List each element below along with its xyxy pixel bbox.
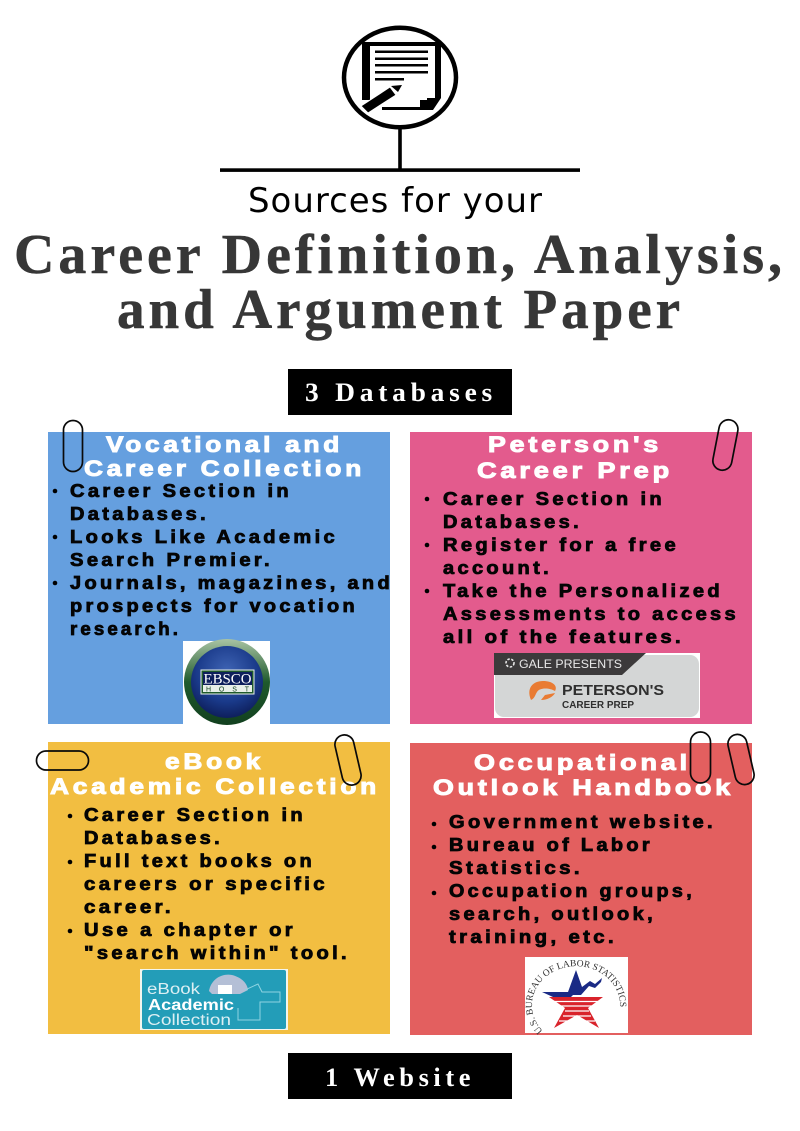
bullet list: Databases. xyxy=(84,828,223,848)
panel heading: Outlook Handbook xyxy=(433,775,734,800)
bullet list: search, outlook, xyxy=(449,904,656,924)
panel heading xyxy=(84,432,365,481)
bullet list: "search within" tool. xyxy=(84,943,350,963)
bullet list: account. xyxy=(443,558,552,578)
logo: eBook Academic Collection xyxy=(140,969,288,1030)
logo: EBSCO host: HOST xyxy=(206,686,250,693)
bullet list: Register for a free xyxy=(443,535,679,555)
logo: U.S. Bureau of Labor Statistics: U.S. BUREAU OF LABOR STATISTICS xyxy=(526,960,626,1035)
bullet list xyxy=(68,805,350,963)
panel: Vocational and Career Collection xyxy=(48,432,393,725)
panel heading xyxy=(433,750,734,800)
title xyxy=(14,181,786,341)
panel heading: Academic Collection xyxy=(50,774,380,799)
bullet list: Bureau of Labor xyxy=(449,835,653,855)
panel: Occupational Outlook Handbook xyxy=(410,743,752,1035)
bullet list: Journals, magazines, and xyxy=(70,573,393,593)
heading: 3 Databases: 3 Databases xyxy=(305,378,497,407)
icon: paperclip, yellow panel top right xyxy=(333,733,363,787)
logo: Gale presents Peterson's Career Prep: PETERSON'S xyxy=(562,682,664,699)
bullet list xyxy=(432,812,716,947)
panel heading: Vocational and xyxy=(106,432,343,457)
panel: eBook Academic Collection xyxy=(48,742,390,1034)
icon: paperclip, red panel right xyxy=(726,733,756,786)
bullet list: Databases. xyxy=(443,512,582,532)
logo: Gale presents Peterson's Career Prep: GALE PRESENTS xyxy=(519,659,622,671)
panel: Peterson's Career Prep xyxy=(410,432,752,724)
logo: eBook Academic Collection: Academic xyxy=(148,997,234,1014)
bullet list: research. xyxy=(70,619,181,639)
bullet list: Looks Like Academic xyxy=(70,527,338,547)
panel heading xyxy=(477,432,673,483)
panel heading: Occupational xyxy=(474,750,691,775)
bullet list: Career Section in xyxy=(443,489,665,509)
logo: EBSCO host xyxy=(183,639,270,725)
panel heading: Career Prep xyxy=(477,458,673,483)
icon: paperclip, red panel left xyxy=(690,732,710,783)
bullet list xyxy=(53,481,393,639)
bullet list: Full text books on xyxy=(84,851,315,871)
bullet list: career. xyxy=(84,897,174,917)
logo: eBook Academic Collection: eBook xyxy=(147,981,200,998)
bullet list: Government website. xyxy=(449,812,716,832)
bullet list: Take the Personalized xyxy=(443,581,723,601)
icon: horizontal paperclip, yellow panel xyxy=(36,751,88,770)
icon: document and pencil in circle on a stand xyxy=(220,28,580,172)
bullet list: prospects for vocation xyxy=(70,596,358,616)
heading: 3 Databases xyxy=(288,369,512,415)
icon: paperclip, blue panel xyxy=(64,420,82,472)
title: Career Definition, Analysis, xyxy=(14,224,786,286)
bullet list: Search Premier. xyxy=(70,550,273,570)
panel heading: eBook xyxy=(165,749,264,774)
heading: 1 Website: 1 Website xyxy=(325,1063,475,1092)
logo: EBSCO host: EBSCO xyxy=(204,672,252,688)
bullet list: careers or specific xyxy=(84,874,328,894)
bullet list: Assessments to access xyxy=(443,604,739,624)
panel heading: Peterson's xyxy=(488,432,662,457)
panel heading xyxy=(50,749,380,799)
logo: Gale presents Peterson's Career Prep xyxy=(494,653,700,718)
panel heading: Career Collection xyxy=(84,456,365,481)
bullet list: Databases. xyxy=(70,504,209,524)
bullet list: training, etc. xyxy=(449,927,617,947)
title: and Argument Paper xyxy=(117,279,684,341)
bullet list xyxy=(425,489,739,647)
bullet list: Occupation groups, xyxy=(449,881,695,901)
bullet list: all of the features. xyxy=(443,627,684,647)
heading: 1 Website xyxy=(288,1053,512,1099)
bullet list: Statistics. xyxy=(449,858,583,878)
logo: eBook Academic Collection: Collection xyxy=(147,1012,231,1029)
bullet list: Career Section in xyxy=(84,805,306,825)
bullet list: Career Section in xyxy=(70,481,292,501)
icon: paperclip, pink panel xyxy=(711,418,740,472)
bullet list: Use a chapter or xyxy=(84,920,296,940)
title: Sources for your xyxy=(248,181,543,221)
logo: Gale presents Peterson's Career Prep: CAREER PREP xyxy=(562,699,634,711)
